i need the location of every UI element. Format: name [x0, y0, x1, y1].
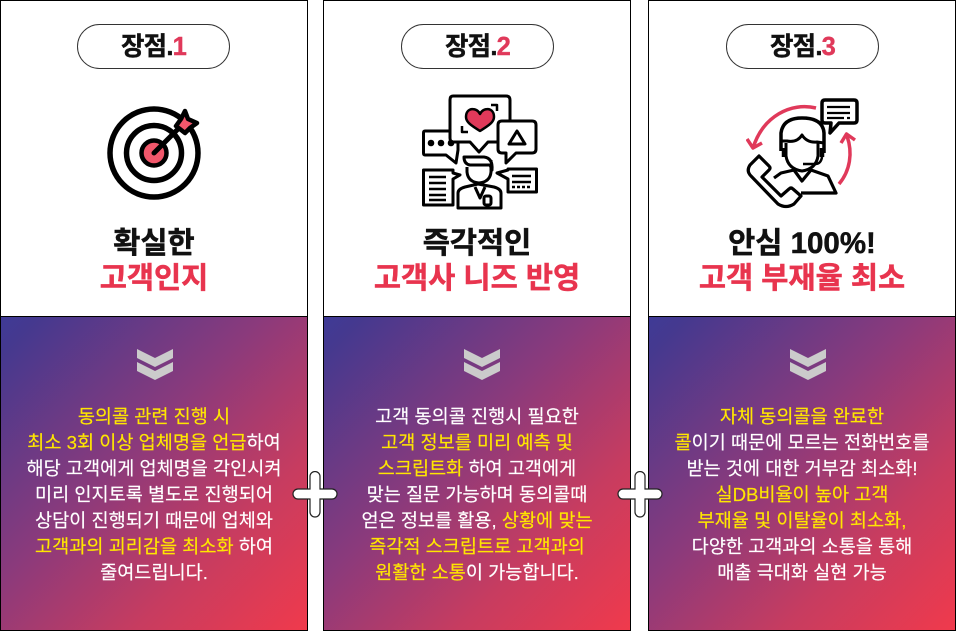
icon: target with arrow [107, 106, 201, 200]
heading: advantage 2: 고객사 니즈 반영 [374, 262, 580, 295]
icon: double chevron [790, 349, 826, 380]
icon: call agent [746, 98, 859, 208]
badge: advantage 2: 장점.2 [445, 33, 510, 61]
body text: advantage 2: 고객 동의콜 진행시 필요한 [375, 406, 579, 427]
panel: advantage 3 [648, 0, 956, 631]
body text: advantage 2: 원활한 소통이 가능합니다. [375, 562, 579, 583]
body text: advantage 1: 미리 인지토록 별도로 진행되어 [35, 484, 273, 505]
body text: advantage 1 [26, 406, 282, 583]
body text: advantage 1: 상담이 진행되기 때문에 업체와 [35, 510, 273, 531]
body text: advantage 3: 다양한 고객과의 소통을 통해 [692, 536, 912, 557]
icon: double chevron [464, 349, 500, 380]
body text: advantage 3: 받는 것에 대한 거부감 최소화! [686, 458, 918, 479]
panel: advantage 2 [323, 0, 631, 631]
gradient block: advantage 1 [1, 316, 307, 630]
icon: plus right [617, 471, 663, 518]
body text: advantage 2: 고객 정보를 미리 예측 및 [381, 432, 573, 453]
body text: advantage 3: 부재율 및 이탈율이 최소화, [698, 510, 906, 531]
badge: advantage 3 [726, 24, 879, 69]
body text: advantage 3: 실DB비율이 높아 고객 [715, 484, 888, 505]
gradient block: advantage 3 [649, 316, 955, 630]
body text: advantage 3 [674, 406, 930, 583]
body text: advantage 1: 해당 고객에게 업체명을 각인시켜 [26, 458, 282, 479]
body text: advantage 1: 동의콜 관련 진행 시 [78, 406, 230, 427]
body text: advantage 1: 최소 3회 이상 업체명을 언급하여 [27, 432, 281, 453]
badge: advantage 3: 장점.3 [770, 33, 835, 61]
body text: advantage 3: 매출 극대화 실현 가능 [717, 562, 887, 583]
body text: advantage 1: 줄여드립니다. [100, 562, 208, 583]
heading: advantage 3: 안심 100%! [728, 227, 876, 260]
heading: advantage 1: 확실한 [113, 227, 195, 260]
body text: advantage 2 [361, 406, 593, 583]
icon: plus left [292, 471, 338, 518]
badge: advantage 2 [401, 24, 554, 69]
icon: double chevron [137, 349, 173, 380]
body text: advantage 2: 즉각적 스크립트로 고객과의 [369, 536, 585, 557]
heading: advantage 2 [374, 227, 580, 295]
body text: advantage 2: 스크립트화 하여 고객에게 [378, 458, 576, 479]
badge: advantage 1: 장점.1 [121, 33, 186, 61]
heading: advantage 3 [699, 227, 905, 295]
body text: advantage 2: 맞는 질문 가능하며 동의콜때 [367, 484, 587, 505]
body text: advantage 1: 고객과의 괴리감을 최소화 하여 [35, 536, 273, 557]
badge: advantage 1 [77, 24, 230, 69]
body text: advantage 3: 자체 동의콜을 완료한 [720, 406, 884, 427]
heading: advantage 2: 즉각적인 [423, 227, 531, 260]
icon: customer speech bubbles [422, 94, 538, 210]
panel: advantage 1 [0, 0, 308, 631]
body text: advantage 2: 얻은 정보를 활용, 상황에 맞는 [361, 510, 593, 531]
body text: advantage 3: 콜이기 때문에 모르는 전화번호를 [674, 432, 930, 453]
heading: advantage 1: 고객인지 [100, 262, 208, 295]
heading: advantage 1 [100, 227, 208, 295]
gradient block: advantage 2 [324, 316, 630, 630]
heading: advantage 3: 고객 부재율 최소 [699, 262, 905, 295]
